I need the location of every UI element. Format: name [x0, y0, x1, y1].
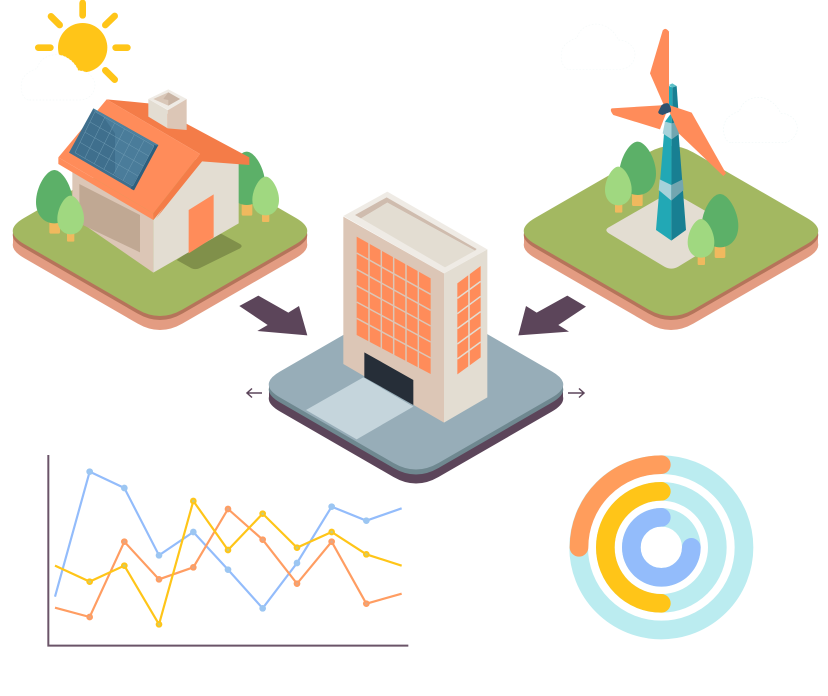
trees behind tower: [605, 142, 656, 213]
icon: cloud by the sun: [21, 55, 95, 100]
small arrow: right: [568, 388, 584, 398]
ring: orange: [579, 465, 661, 547]
panel: wind turbine island: [524, 24, 818, 330]
island base: wind turbine: [524, 146, 818, 330]
side windows: [457, 266, 481, 374]
series: yellow: [55, 498, 402, 628]
ring tracks: [579, 465, 744, 630]
tower body: [656, 113, 686, 241]
trees behind house: [228, 152, 279, 222]
paved pad: [606, 193, 735, 269]
island base: house: [13, 146, 307, 330]
building walls: [343, 217, 487, 423]
arrow: wind turbine to building: [518, 296, 586, 335]
series: blue: [55, 468, 402, 612]
building door: [364, 352, 413, 405]
turbine hub: [658, 103, 671, 115]
ring: blue: [631, 517, 691, 577]
clouds near turbine: [561, 24, 797, 143]
ring: yellow: [605, 491, 661, 603]
series: orange: [55, 506, 402, 620]
radial ring chart: [579, 465, 744, 630]
house illustration: [36, 89, 279, 273]
front windows: [357, 237, 431, 374]
solar panel: [69, 108, 158, 190]
panel: house island: [13, 3, 307, 330]
chimney: [148, 89, 187, 130]
panel: central building: [269, 192, 563, 483]
small arrow: left: [247, 388, 262, 398]
trees in front of house: [36, 170, 84, 242]
turbine blades: [611, 29, 726, 176]
arrow: house to building: [239, 296, 307, 335]
building roof: [343, 192, 487, 273]
chart axes: [48, 455, 408, 646]
line chart: [48, 455, 408, 646]
house walls: [72, 160, 239, 273]
tower mast: [668, 83, 678, 110]
building illustration: [306, 192, 487, 439]
house roof: [58, 99, 249, 220]
wind turbine illustration: [605, 29, 738, 269]
icon: sun: [38, 3, 127, 80]
walkway: [306, 377, 413, 439]
island base: building: [269, 300, 563, 484]
trees in front of tower: [688, 194, 738, 265]
house shadow: [177, 233, 242, 269]
